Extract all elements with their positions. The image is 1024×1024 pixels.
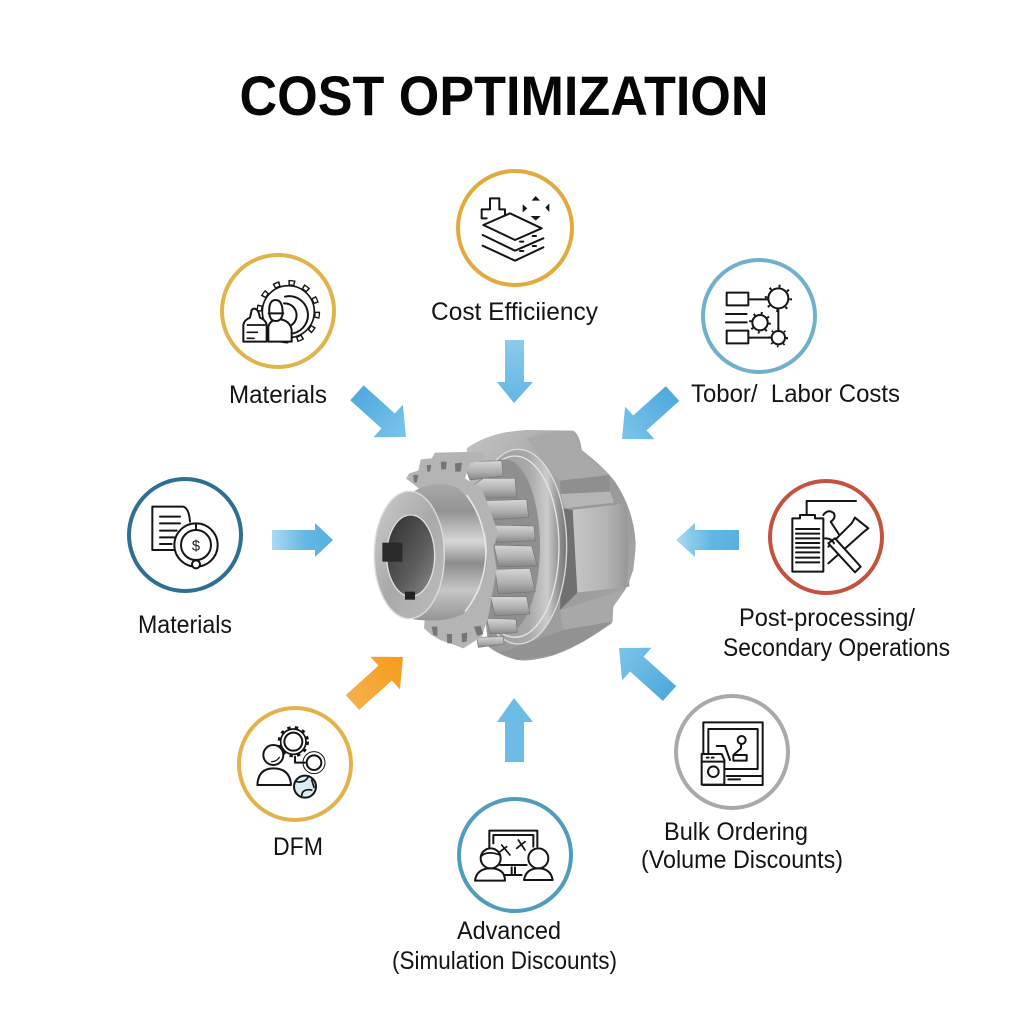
ring [458, 171, 572, 285]
panel: post-processing [723, 481, 950, 662]
arrow: right, pointing left [676, 523, 739, 557]
title: COST OPTIMIZATION [240, 64, 768, 127]
label: Post-processing/ [739, 604, 915, 632]
icon: flow of boxes and gears [726, 286, 791, 346]
ring [676, 696, 788, 808]
ring [239, 708, 351, 820]
panel: bulk ordering [641, 696, 843, 874]
panel: advanced simulation [392, 799, 617, 975]
icon: layered sheets [482, 196, 549, 261]
arrow: upper left, pointing to gear [342, 376, 421, 453]
label line 2: (Volume Discounts) [641, 846, 843, 874]
icon: document with dollar coin [152, 507, 218, 568]
label: Materials [229, 381, 327, 409]
icon: clipboard and tools [792, 501, 868, 572]
label line 2: (Simulation Discounts) [392, 947, 617, 975]
ring [222, 255, 334, 367]
icon: two people at a monitor [475, 831, 553, 881]
ring [459, 799, 571, 911]
arrow: left, pointing right [272, 523, 333, 557]
panel: cost efficiency [431, 171, 598, 326]
ring [770, 481, 882, 593]
ring [129, 479, 241, 591]
arrow: upper right, pointing to gear [607, 377, 687, 455]
panel: labor costs [691, 260, 900, 408]
label: Advanced [457, 917, 561, 945]
icon: gear with worker and bottle [243, 283, 317, 342]
arrow: lower right, pointing to gear [604, 632, 684, 710]
panel: materials left [129, 479, 241, 639]
central gear illustration [374, 430, 636, 661]
label: Tobor/ Labor Costs [691, 380, 900, 408]
label line 2: Secondary Operations [723, 634, 950, 662]
arrow: lower left, orange [338, 641, 418, 719]
panel: DFM [239, 708, 351, 861]
ring [703, 260, 815, 372]
label: DFM [273, 833, 323, 861]
label: Cost Efficiiency [431, 298, 598, 326]
panel: materials top [222, 255, 334, 409]
arrow: top, pointing down [497, 340, 533, 403]
icon: person with gears and globe [257, 727, 325, 798]
arrow: bottom, pointing up [497, 698, 533, 762]
label: Materials [138, 611, 232, 639]
icon: screen with person and washer [702, 722, 763, 785]
label: Bulk Ordering [664, 818, 808, 846]
icon: document with dollar coin: $ [192, 538, 200, 554]
